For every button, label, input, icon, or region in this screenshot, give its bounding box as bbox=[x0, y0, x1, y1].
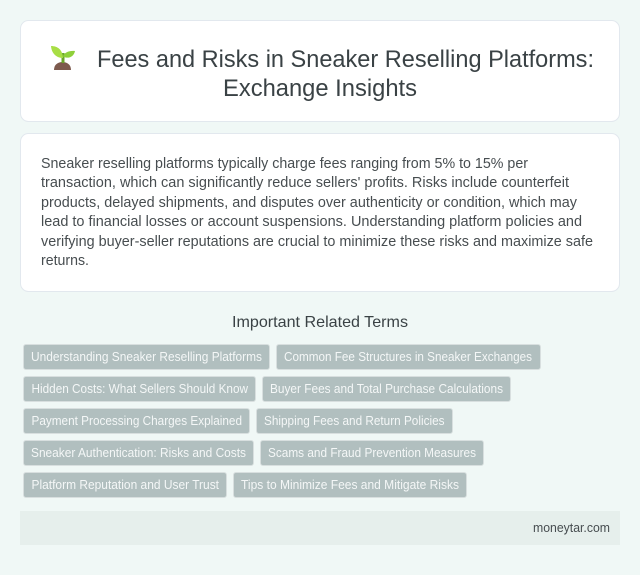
tag: shipping fees bbox=[256, 408, 452, 434]
tag: common fee structures: Common Fee Structures in Sneaker Exchanges bbox=[284, 349, 532, 364]
tag: tips to minimize bbox=[234, 472, 466, 498]
footer text: site name: moneytar.com bbox=[533, 520, 610, 535]
tag: payment processing: Payment Processing Charges Explained bbox=[32, 413, 242, 428]
text block: summary: products, delayed shipments, and disputes over authenticity or condition, which may bbox=[41, 194, 577, 211]
tag: buyer fees: Buyer Fees and Total Purchase Calculations bbox=[270, 381, 503, 396]
text block: summary: Sneaker reselling platforms typically charge fees ranging from 5% to 15% per bbox=[41, 155, 528, 172]
tag: payment processing bbox=[24, 408, 250, 434]
footer bbox=[20, 511, 620, 545]
text block: summary: returns. bbox=[41, 252, 89, 269]
tag: understanding platforms bbox=[24, 344, 270, 370]
text block: summary bbox=[41, 155, 593, 269]
text block: summary: lead to financial losses or account suspensions. Understanding platform policies and bbox=[41, 213, 582, 230]
text block: summary: transaction, which can significantly reduce sellers' profits. Risks include counterfeit bbox=[41, 174, 570, 191]
text block: summary: verifying buyer-seller reputations are crucial to minimize these risks and maximize safe bbox=[41, 233, 593, 250]
panel: summary card bbox=[20, 134, 620, 292]
tag: shipping fees: Shipping Fees and Return Policies bbox=[264, 413, 444, 428]
tag: authentication bbox=[24, 440, 254, 466]
tag: authentication: Sneaker Authentication: Risks and Costs bbox=[31, 445, 246, 460]
tag: understanding platforms: Understanding Sneaker Reselling Platforms bbox=[31, 349, 262, 364]
tag: hidden costs: Hidden Costs: What Sellers Should Know bbox=[32, 381, 249, 396]
title bbox=[97, 46, 594, 102]
icon: sprout bbox=[51, 46, 75, 70]
title: Fees and Risks in Sneaker Reselling Platforms: bbox=[97, 46, 594, 73]
tag group: related terms bbox=[24, 344, 540, 498]
tag: hidden costs bbox=[24, 376, 256, 402]
tag: buyer fees bbox=[262, 376, 510, 402]
tag: scams and fraud bbox=[260, 440, 484, 466]
tag: platform reputation bbox=[24, 472, 226, 498]
tag: scams and fraud: Scams and Fraud Prevention Measures bbox=[268, 445, 476, 460]
tag: tips to minimize: Tips to Minimize Fees and Mitigate Risks bbox=[241, 477, 459, 492]
tag: common fee structures bbox=[276, 344, 540, 370]
heading: related terms: Important Related Terms bbox=[232, 314, 408, 331]
tag: platform reputation: Platform Reputation and User Trust bbox=[32, 477, 219, 492]
panel: title card bbox=[20, 20, 620, 122]
title: Exchange Insights bbox=[223, 75, 417, 102]
